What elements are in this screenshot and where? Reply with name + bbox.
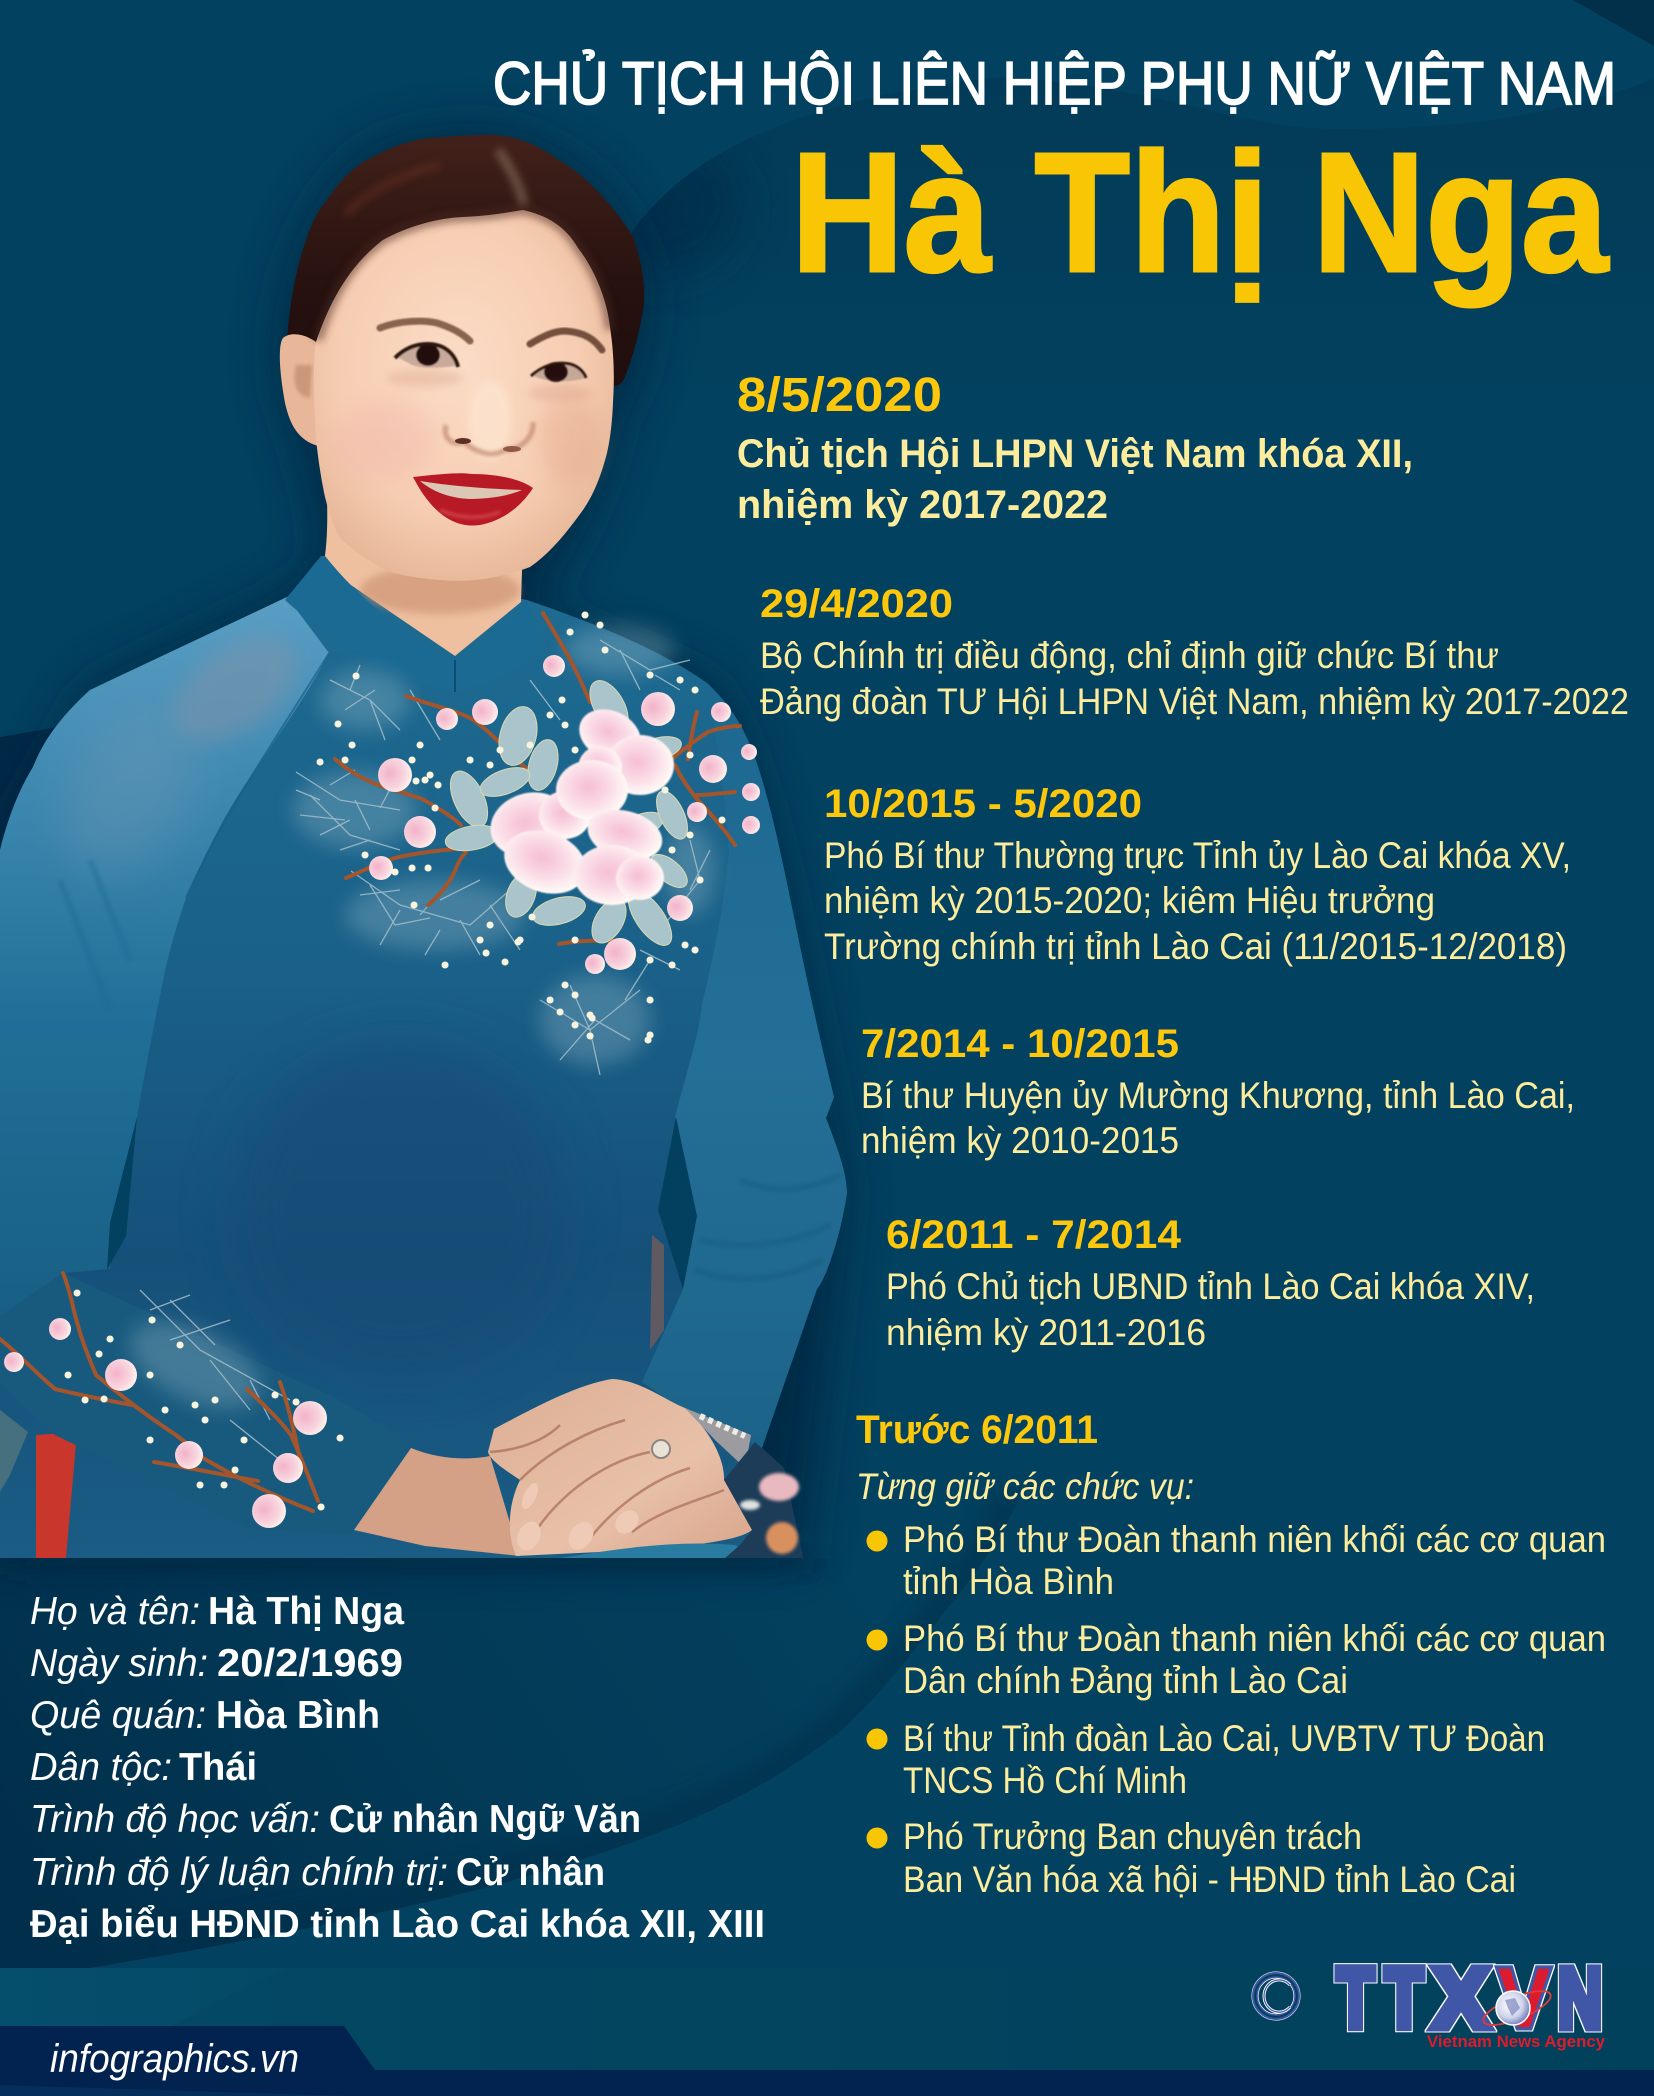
left sleeve [0,597,329,1316]
neck [323,500,523,656]
hair shadow on forehead [318,210,610,340]
bullet list of earlier posts: Dân chính Đảng tỉnh Lào Cai [903,1660,1348,1701]
TTXVN logo: V [1498,1951,1550,2045]
globe [1480,1984,1554,2032]
personal information panel: Hòa Bình [216,1694,380,1737]
timeline entry: 29/4/2020: Bộ Chính trị điều động, chỉ định giữ chức Bí thư [760,635,1499,676]
name heading: Hà Thị Nga [791,118,1609,308]
TTXVN logo [1337,1951,1606,2051]
TTXVN logo: Vietnam News Agency [1427,2032,1606,2051]
timeline entry: 7/2014 - 10/2015: nhiệm kỳ 2010-2015 [861,1120,1179,1161]
bullet list of earlier posts: Phó Bí thư Đoàn thanh niên khối các cơ quan [903,1618,1606,1659]
bullet list of earlier posts: tỉnh Hòa Bình [903,1561,1114,1602]
right sleeve [642,683,847,1448]
timeline entry: 29/4/2020 [760,582,1629,722]
embroidery: twigs [140,640,710,1460]
embroidery: leaves [443,674,694,952]
timeline entry: Trước 6/2011: Trước 6/2011 [856,1408,1098,1452]
embroidery: pale haze [117,625,715,1426]
nose [468,380,512,460]
personal information panel: Trình độ học vấn: [30,1798,320,1841]
embroidery: small blossoms [4,655,760,1528]
timeline entry: 7/2014 - 10/2015: Bí thư Huyện ủy Mường Khương, tỉnh Lào Cai, [861,1075,1575,1116]
timeline entry: 10/2015 - 5/2020: Trường chính trị tỉnh Lào Cai (11/2015-12/2018) [824,926,1567,967]
bullet list of earlier posts: Phó Bí thư Đoàn thanh niên khối các cơ quan [903,1519,1606,1560]
bullet list of earlier posts: Phó Trưởng Ban chuyên trách [903,1816,1362,1857]
sheer shoulder patch [155,617,315,763]
personal information panel: Họ và tên: [30,1590,200,1633]
footer bar [0,2026,1654,2096]
hair back [287,135,644,445]
timeline entry: 10/2015 - 5/2020: Phó Bí thư Thường trực Tỉnh ủy Lào Cai khóa XV, [824,835,1571,876]
collar [285,556,541,692]
face [314,210,614,581]
garment body [0,560,847,1558]
timeline entry: 7/2014 - 10/2015 [861,1022,1575,1161]
timeline entry: 7/2014 - 10/2015: 7/2014 - 10/2015 [861,1022,1179,1066]
timeline entry: 8/5/2020: Chủ tịch Hội LHPN Việt Nam khóa XII, [737,432,1413,476]
timeline entry: Trước 6/2011: Từng giữ các chức vụ: [856,1466,1194,1507]
lap fabric [560,1543,760,1558]
portrait photo of Hà Thị Nga [0,135,847,1558]
personal information panel: Ngày sinh: [30,1642,208,1685]
personal information panel: Quê quán: [30,1694,206,1737]
timeline entry: 10/2015 - 5/2020 [824,782,1571,967]
lower garment and red stripe [36,1432,77,1558]
timeline entry: 6/2011 - 7/2014: 6/2011 - 7/2014 [886,1213,1182,1257]
ear [280,334,325,446]
bullet list of earlier posts: TNCS Hồ Chí Minh [903,1760,1187,1801]
timeline entry: 10/2015 - 5/2020: 10/2015 - 5/2020 [824,782,1142,826]
personal information panel [30,1590,765,1946]
TTXVN logo: X [1433,1951,1489,2045]
copyright icon [1252,1972,1300,2020]
personal information panel: Dân tộc: [30,1746,172,1789]
personal information panel: Thái [179,1746,257,1789]
right floral fabric [724,1442,803,1558]
timeline entry: 6/2011 - 7/2014 [886,1213,1535,1353]
bullet list of earlier posts [866,1519,1606,1900]
personal information panel: Đại biểu HĐND tỉnh Lào Cai khóa XII, XIII [30,1903,765,1946]
mouth [413,473,533,526]
eyebrows [380,321,470,341]
TTXVN logo: N [1558,1951,1602,2045]
personal information panel: Cử nhân [456,1851,605,1894]
timeline entry: 10/2015 - 5/2020: nhiệm kỳ 2015-2020; kiêm Hiệu trưởng [824,880,1435,921]
hair strand highlights [498,150,524,205]
embroidery: white dots [68,615,722,1507]
cheek blush [335,400,435,480]
timeline entry: 8/5/2020: nhiệm kỳ 2017-2022 [737,483,1108,527]
timeline entry: 6/2011 - 7/2014: Phó Chủ tịch UBND tỉnh Lào Cai khóa XIV, [886,1266,1535,1307]
bullet list of earlier posts: Bí thư Tỉnh đoàn Lào Cai, UVBTV TƯ Đoàn [903,1718,1545,1759]
left cuff [0,1273,411,1535]
side embroidery [650,1235,664,1350]
body shading [230,1040,570,1380]
embroidery: large pink blossoms [483,700,674,905]
personal information panel: Trình độ lý luận chính trị: [30,1851,448,1894]
under-chin shade [360,566,520,614]
personal information panel: Hà Thị Nga [208,1590,404,1633]
raglan seam [186,653,329,898]
timeline entry: 29/4/2020: 29/4/2020 [760,582,953,626]
timeline entry: Trước 6/2011 [856,1408,1606,1900]
TTXVN logo: T [1385,1951,1423,2045]
footer site name: infographics.vn [50,2037,299,2081]
embroidery: branches [0,613,740,1511]
timeline entry: 6/2011 - 7/2014: nhiệm kỳ 2011-2016 [886,1312,1206,1353]
timeline entry: 8/5/2020 [737,369,1413,527]
timeline entry: 8/5/2020: 8/5/2020 [737,369,942,422]
TTXVN logo: T [1337,1951,1374,2045]
personal information panel: Cử nhân Ngữ Văn [329,1798,641,1841]
bullet list of earlier posts: Ban Văn hóa xã hội - HĐND tỉnh Lào Cai [903,1859,1516,1900]
hands [354,1379,752,1556]
gaps between arms and body [658,1117,697,1289]
personal information panel: 20/2/1969 [217,1642,403,1685]
figure shadow [0,130,845,1558]
eyes [395,344,586,382]
